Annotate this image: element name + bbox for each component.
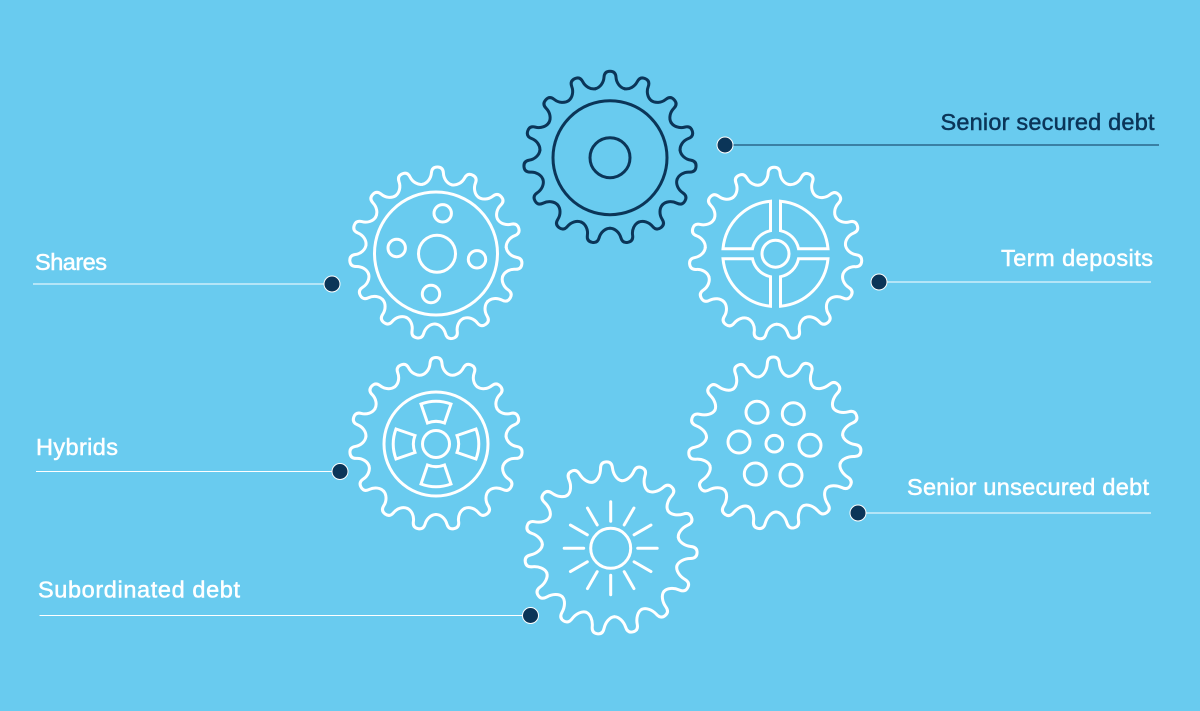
label: senior secured debt: Senior secured debt bbox=[940, 109, 1155, 135]
label: hybrids: Hybrids bbox=[36, 434, 118, 460]
gear: term deposits bbox=[686, 166, 865, 343]
label: shares: Shares bbox=[35, 249, 107, 275]
label: senior secured debt bbox=[717, 109, 1159, 153]
gear: hybrids bbox=[348, 358, 524, 532]
label: subordinated debt: Subordinated debt bbox=[38, 576, 240, 602]
gear: subordinated debt bbox=[519, 457, 703, 640]
label: senior unsecured debt bbox=[850, 474, 1151, 521]
label: term deposits: Term deposits bbox=[1001, 245, 1153, 271]
label: senior unsecured debt: Senior unsecured debt bbox=[907, 474, 1149, 500]
label: subordinated debt bbox=[38, 576, 538, 624]
gear: shares bbox=[347, 165, 525, 343]
label: term deposits bbox=[871, 245, 1153, 290]
gear: senior unsecured debt bbox=[686, 355, 864, 533]
label: shares bbox=[33, 249, 340, 292]
gear: senior secured debt bbox=[522, 71, 698, 245]
label: hybrids bbox=[36, 434, 348, 480]
